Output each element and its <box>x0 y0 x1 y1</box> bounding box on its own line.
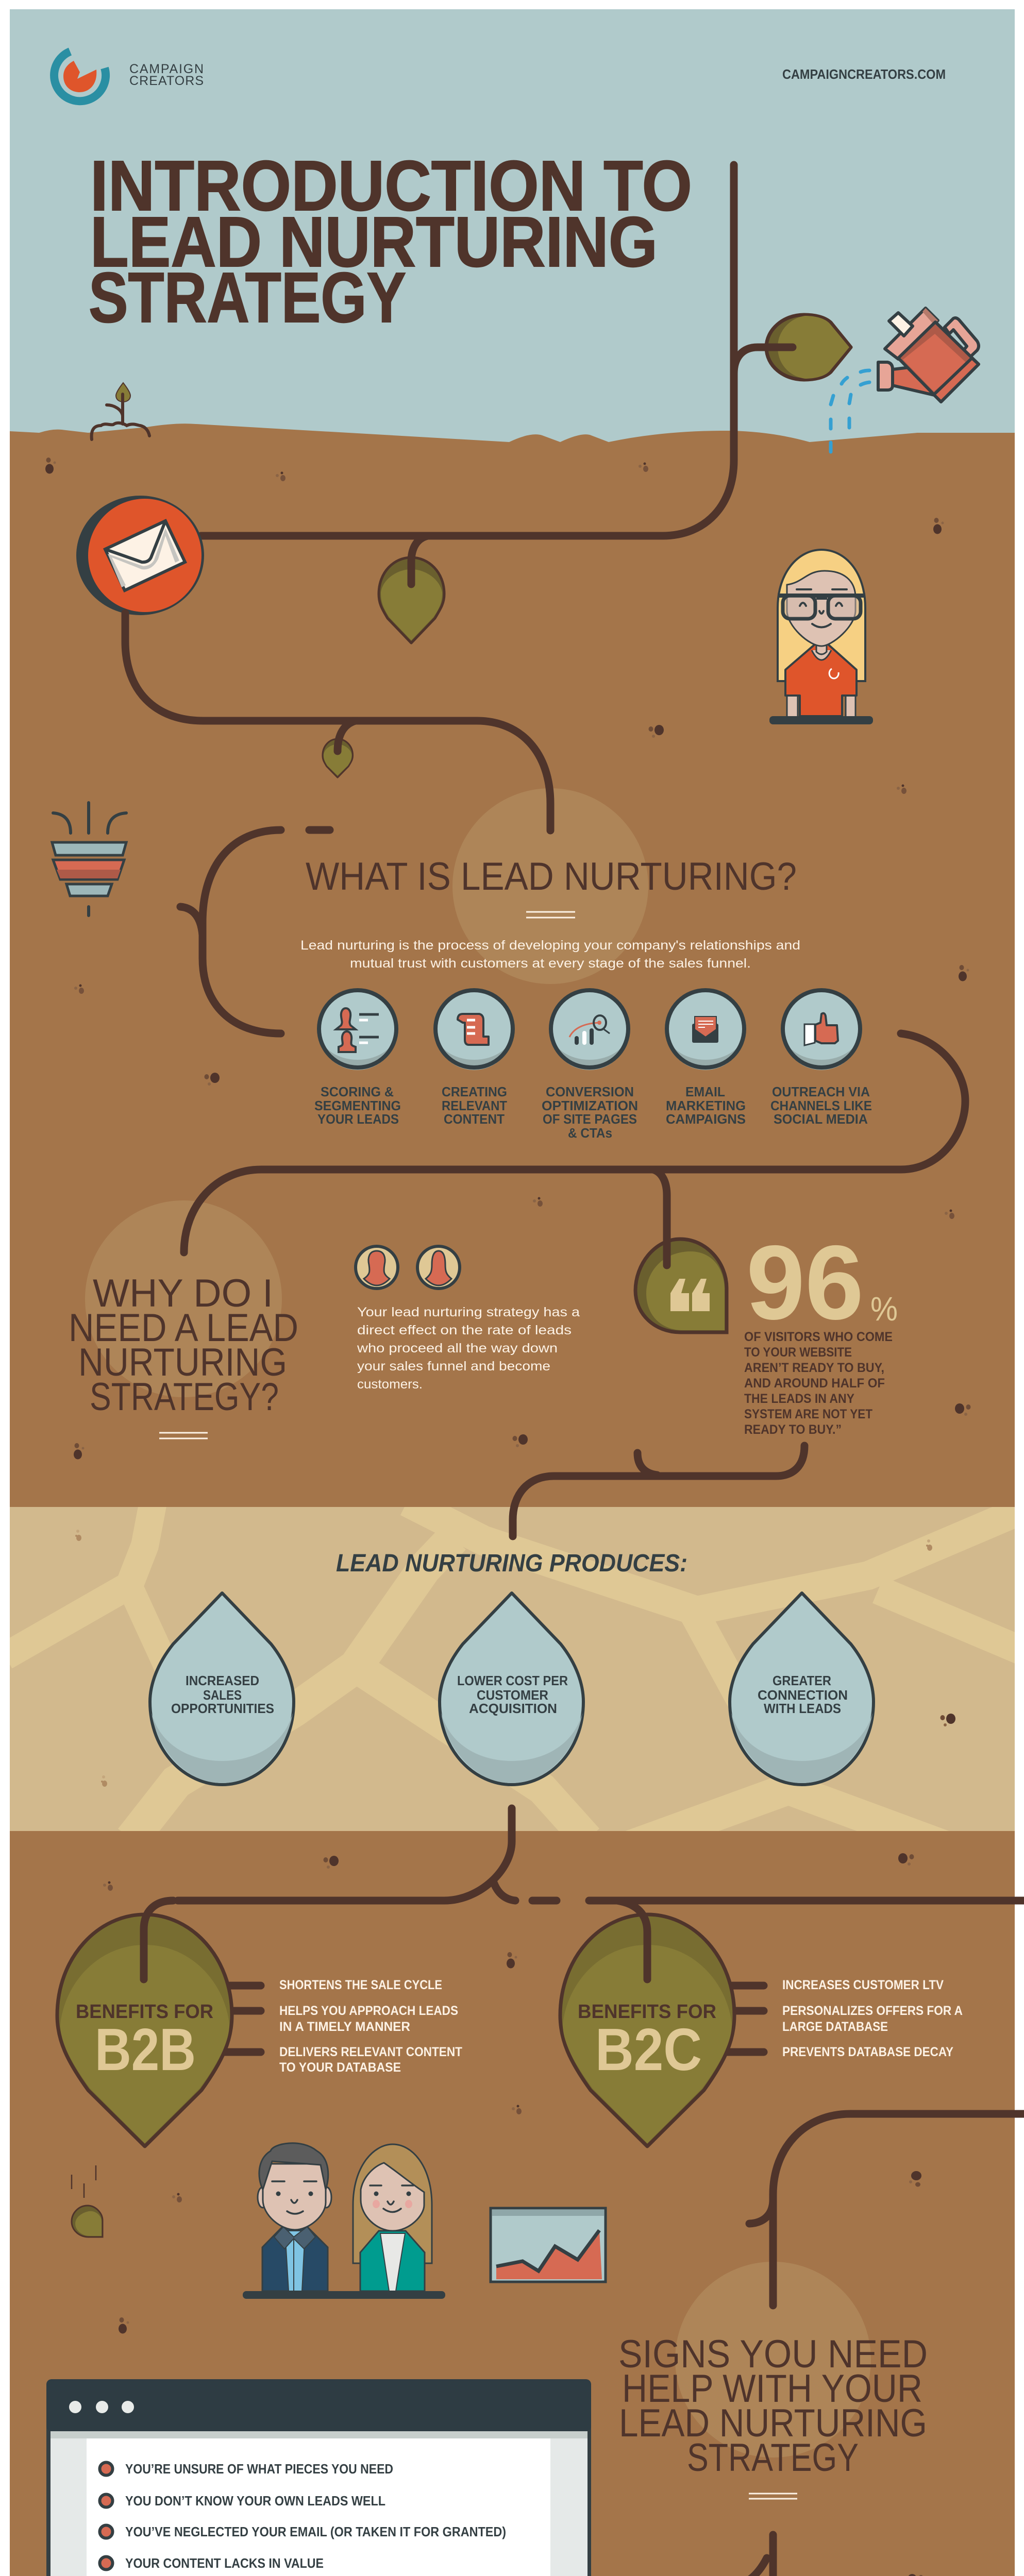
heading: STRATEGY <box>687 2436 859 2480</box>
leaf label: BENEFITS FOR <box>76 2001 213 2023</box>
drop: lower cost: CUSTOMER <box>477 1687 548 1703</box>
label: conversion: OF SITE PAGES <box>543 1111 637 1127</box>
heading underline <box>159 1433 208 1438</box>
b2c benefit list: PREVENTS DATABASE DECAY <box>782 2045 953 2059</box>
panel: what is lead nurturing <box>300 855 800 971</box>
icon: funnel <box>52 803 126 916</box>
email badge <box>76 496 204 615</box>
heading <box>69 1272 298 1419</box>
logo mark <box>54 52 106 101</box>
icon: creating content <box>435 990 513 1070</box>
glasses <box>778 596 865 598</box>
prongs <box>723 1986 764 2052</box>
drop: greater connection: WITH LEADS <box>764 1701 841 1716</box>
label: content: CONTENT <box>444 1111 505 1127</box>
stat description: TO YOUR WEBSITE <box>744 1345 852 1360</box>
why text block: who proceed all the way down <box>357 1341 558 1355</box>
stat description: READY TO BUY.” <box>744 1422 842 1437</box>
logo wordmark <box>129 62 204 88</box>
woman body <box>360 2231 425 2291</box>
icon labels <box>314 1084 872 1141</box>
icon: scoring and segmenting <box>319 990 396 1070</box>
checklist text: YOU DON’T KNOW YOUR OWN LEADS WELL <box>125 2493 385 2509</box>
browser window checklist <box>46 2379 591 2576</box>
checklist text: YOU’VE NEGLECTED YOUR EMAIL (OR TAKEN IT FOR GRANTED) <box>125 2524 506 2539</box>
panel: why do i need <box>69 1272 298 1438</box>
description <box>300 938 800 971</box>
b2b benefit list: IN A TIMELY MANNER <box>279 2020 410 2034</box>
big label: B2C <box>595 2016 702 2083</box>
neck <box>812 644 831 660</box>
b2b benefit list: SHORTENS THE SALE CYCLE <box>279 1978 442 1992</box>
icon: lead avatars <box>356 1246 460 1289</box>
heading: STRATEGY? <box>90 1375 279 1419</box>
stat description: THE LEADS IN ANY <box>744 1392 854 1406</box>
icon: top leaf <box>766 315 851 380</box>
why text block: direct effect on the rate of leads <box>357 1323 572 1337</box>
heading: NURTURING <box>78 1341 287 1384</box>
torso <box>785 644 857 716</box>
stat description: OF VISITORS WHO COME <box>744 1330 893 1344</box>
window body <box>51 2431 587 2576</box>
label: scoring: YOUR LEADS <box>317 1111 399 1127</box>
stat description: SYSTEM ARE NOT YET <box>744 1407 872 1421</box>
cracked sand band <box>10 1507 1015 1831</box>
panel: signs you need help <box>618 2332 928 2499</box>
number: 96 <box>746 1224 864 1342</box>
woman hair <box>353 2144 432 2263</box>
label: scoring: SEGMENTING <box>314 1098 401 1113</box>
woman face <box>361 2163 424 2231</box>
description: mutual trust with customers at every stage of the sales funnel. <box>350 956 751 971</box>
leaf: small <box>323 721 356 777</box>
drop: greater connection <box>730 1593 874 1785</box>
label: conversion: OPTIMIZATION <box>542 1098 638 1113</box>
heading: NEED A LEAD <box>69 1306 298 1350</box>
stem: bracket around what is section <box>180 830 330 1033</box>
title: LEAD NURTURING <box>90 202 658 282</box>
logo wordmark: CREATORS <box>129 74 204 88</box>
icon: conversion optimization <box>551 990 628 1070</box>
character: woman with glasses <box>769 550 873 724</box>
heading underline <box>749 2494 797 2499</box>
chart <box>491 2208 606 2282</box>
facial details <box>797 589 847 628</box>
icon: sprout <box>92 383 149 439</box>
percent sign: % <box>870 1290 898 1328</box>
big label: B2B <box>95 2016 196 2083</box>
icon: envelope <box>105 521 185 590</box>
panel: lead nurturing produces <box>150 1550 874 1785</box>
leaf: benefits for b2b <box>57 1901 261 2146</box>
stem: benefits vine <box>178 1808 1024 1904</box>
checklist text: YOUR CONTENT LACKS IN VALUE <box>125 2555 324 2571</box>
b2b benefit list: TO YOUR DATABASE <box>279 2060 401 2075</box>
platform <box>243 2291 445 2299</box>
leaf: hanging from vine <box>379 536 444 643</box>
logo wordmark: CAMPAIGN <box>129 62 204 76</box>
stem: top vine <box>201 165 734 536</box>
b2b benefit list <box>279 1978 462 2075</box>
label: content: RELEVANT <box>442 1098 507 1113</box>
label: scoring <box>314 1084 401 1127</box>
label: email: EMAIL <box>685 1084 725 1099</box>
heading: HELP WITH YOUR <box>622 2367 922 2411</box>
drop: increased sales: SALES <box>203 1687 242 1703</box>
drop: increased sales: OPPORTUNITIES <box>171 1701 274 1716</box>
heading halos <box>85 788 871 2576</box>
stat description <box>744 1330 893 1437</box>
logo <box>54 52 204 101</box>
drop: lower cost: ACQUISITION <box>469 1701 557 1716</box>
why text block: customers. <box>357 1377 423 1392</box>
platform <box>769 716 873 724</box>
soil specks <box>45 457 971 2576</box>
drop: lower cost <box>440 1593 583 1785</box>
header dots <box>69 2401 134 2413</box>
leaf label: BENEFITS FOR <box>578 2001 716 2023</box>
why text block: your sales funnel and become <box>357 1359 550 1374</box>
b2b benefit list: HELPS YOU APPROACH LEADS <box>279 2004 458 2018</box>
drop: lower cost: LOWER COST PER <box>457 1673 568 1688</box>
label: outreach: SOCIAL MEDIA <box>774 1111 868 1127</box>
stat description: AND AROUND HALF OF <box>744 1376 885 1391</box>
stem: vine to what is lead nurturing <box>125 613 550 831</box>
label: outreach <box>770 1084 872 1127</box>
label: conversion: & CTAs <box>568 1125 612 1141</box>
heading: SIGNS YOU NEED <box>618 2332 928 2376</box>
prongs <box>222 1986 261 2052</box>
why text block <box>357 1305 580 1392</box>
window frame <box>46 2379 591 2576</box>
stem: connector to produces band <box>513 1446 804 1536</box>
stat description: AREN’T READY TO BUY, <box>744 1361 884 1375</box>
heading: WHY DO I <box>93 1272 273 1315</box>
face <box>787 571 855 646</box>
sky background <box>10 9 1015 463</box>
man hair <box>259 2143 328 2190</box>
b2c benefit list: PERSONALIZES OFFERS FOR A <box>782 2004 963 2018</box>
stem: right loop <box>184 1033 965 1252</box>
checklist text: YOU’RE UNSURE OF WHAT PIECES YOU NEED <box>125 2461 393 2477</box>
b2b benefit list: DELIVERS RELEVANT CONTENT <box>279 2045 462 2059</box>
description: Lead nurturing is the process of developing your company's relationships and <box>300 938 800 953</box>
heading underline <box>526 912 575 918</box>
label: email <box>666 1084 746 1127</box>
arms <box>787 693 855 717</box>
heading: WHAT IS LEAD NURTURING? <box>306 855 797 899</box>
stem: signs vine <box>749 2110 1024 2306</box>
character: businessman and woman <box>243 2143 445 2299</box>
title <box>89 146 692 337</box>
stat: 96 percent <box>744 1224 898 1437</box>
checklist text <box>125 2461 531 2576</box>
icon: social outreach <box>783 990 860 1070</box>
quote leaf <box>635 1170 727 1332</box>
icon: watering can <box>878 308 979 402</box>
label: email: MARKETING <box>666 1098 746 1113</box>
window header <box>46 2379 591 2431</box>
icon: quote marks <box>670 1279 710 1311</box>
label: content: CREATING <box>442 1084 507 1099</box>
man body <box>262 2227 328 2291</box>
title: INTRODUCTION TO <box>90 146 692 226</box>
heading: LEAD NURTURING <box>619 2401 927 2445</box>
shirt logo <box>829 669 838 679</box>
heading: LEAD NURTURING PRODUCES: <box>336 1550 687 1577</box>
heading <box>618 2332 928 2480</box>
drop: greater connection: GREATER <box>773 1673 831 1688</box>
man face <box>263 2164 326 2230</box>
label: scoring: SCORING & <box>321 1084 394 1099</box>
label: conversion <box>542 1084 638 1141</box>
hair <box>778 550 865 681</box>
why text block: Your lead nurturing strategy has a <box>357 1305 580 1319</box>
title: STRATEGY <box>89 258 406 337</box>
drop: greater connection: CONNECTION <box>758 1687 848 1703</box>
website url: CAMPAIGNCREATORS.COM <box>782 66 946 82</box>
label: content <box>442 1084 507 1127</box>
label: conversion: CONVERSION <box>546 1084 634 1099</box>
label: outreach: OUTREACH VIA <box>772 1084 870 1099</box>
stem: branch to top leaf <box>734 315 851 380</box>
checklist bullets <box>100 2463 112 2576</box>
icon: email campaigns <box>667 990 744 1070</box>
man ears <box>258 2187 331 2208</box>
b2c benefit list: INCREASES CUSTOMER LTV <box>782 1978 944 1992</box>
drop: increased sales <box>150 1593 294 1785</box>
drop: increased sales: INCREASED <box>186 1673 259 1688</box>
leaf: benefits for b2c <box>560 1901 764 2146</box>
b2c benefit list: LARGE DATABASE <box>782 2020 888 2034</box>
stem: lower vine <box>513 2535 795 2576</box>
label: email: CAMPAIGNS <box>666 1111 746 1127</box>
water drips <box>831 370 869 452</box>
icon: falling leaf <box>72 2165 103 2237</box>
label: outreach: CHANNELS LIKE <box>770 1098 872 1113</box>
b2c benefit list <box>782 1978 963 2059</box>
